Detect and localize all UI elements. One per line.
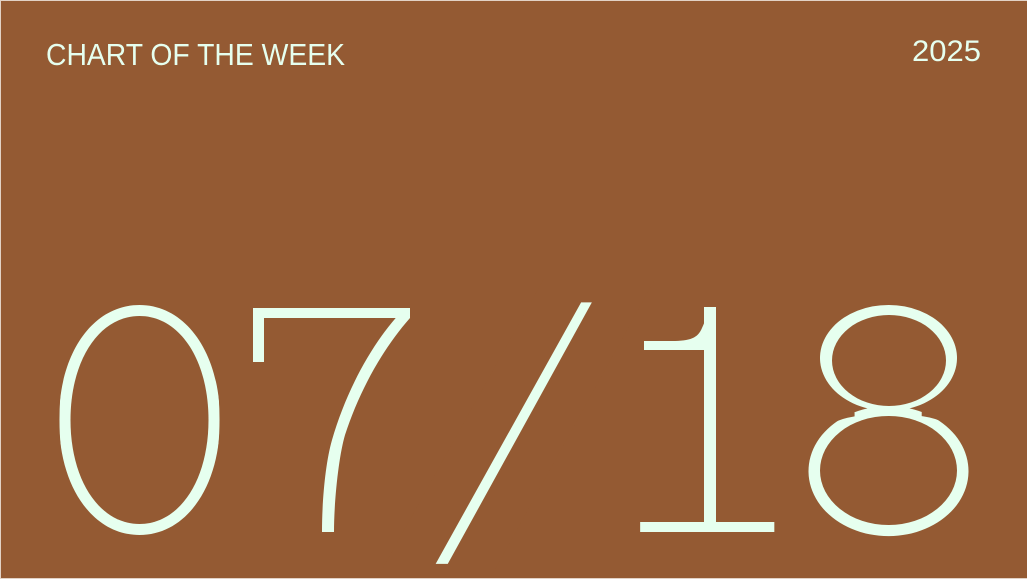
year label: 2025 (912, 35, 981, 68)
digit 1 (640, 307, 774, 532)
heading: chart of the week: CHART OF THE WEEK (46, 38, 345, 72)
large date: 07/18 (59, 302, 968, 564)
